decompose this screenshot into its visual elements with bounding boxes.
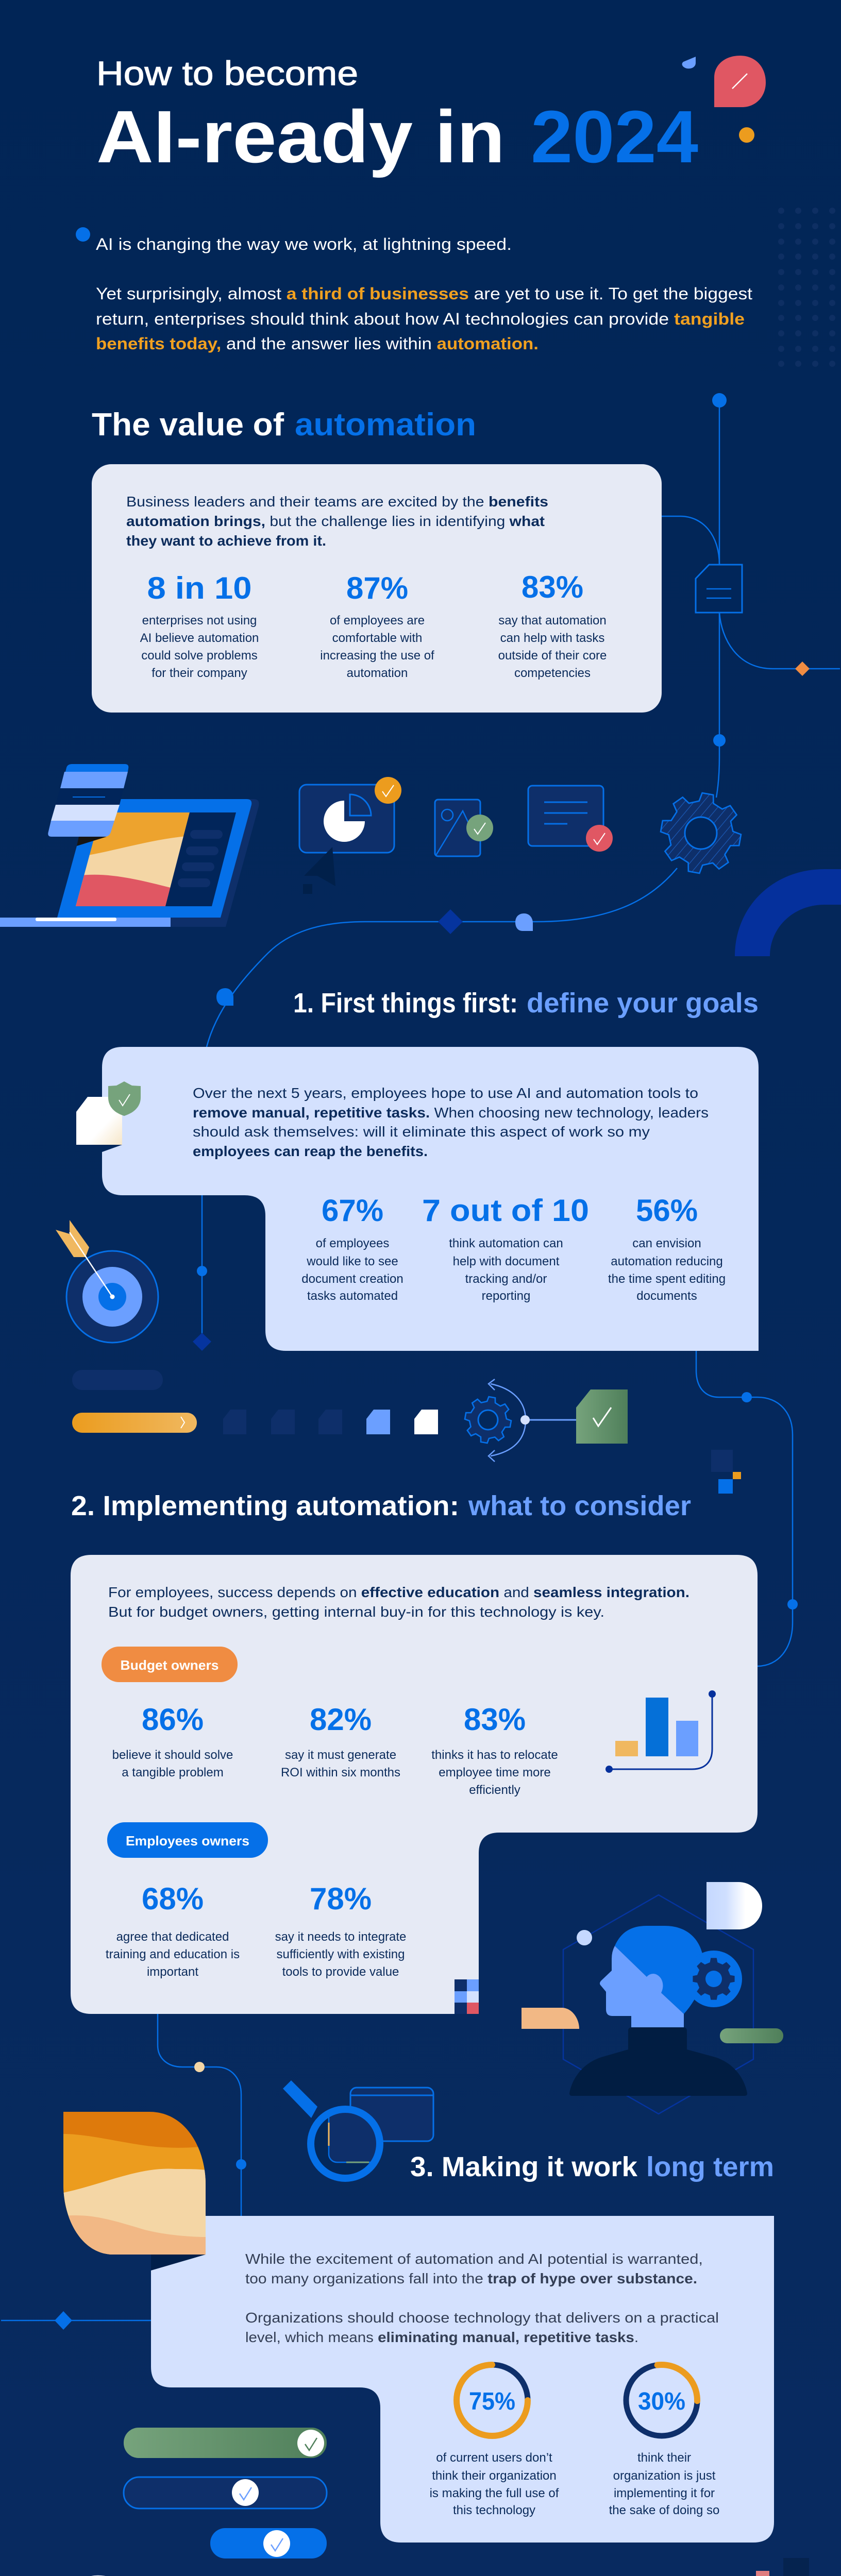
stat: 83%: employee time more — [439, 1766, 551, 1780]
stat: 78%: tools to provide value — [282, 1965, 399, 1979]
pill: employees owners — [107, 1822, 268, 1858]
connector lines: goals section — [193, 1195, 798, 1666]
stat: 68%: training and education is — [106, 1947, 240, 1961]
stat: 7 out of 10: reporting — [482, 1289, 530, 1303]
stat: 67% — [301, 1193, 403, 1303]
stat: 87% — [320, 571, 434, 680]
intro text — [76, 227, 752, 353]
stat: 86%: a tangible problem — [122, 1766, 224, 1780]
stat: 68% — [106, 1882, 240, 1979]
title: AI-ready in — [96, 95, 505, 178]
panel text: While the excitement of automation and AI potential is warranted, — [245, 2251, 703, 2267]
stat: 7 out of 10: tracking and/or — [465, 1272, 547, 1286]
mosaic squares — [455, 1979, 479, 2014]
text: 30% caption: the sake of doing so — [609, 2503, 719, 2517]
connector lines: right side of value section — [207, 393, 840, 1047]
stat: 8 in 10: for their company — [152, 666, 247, 680]
icon: document and shield — [76, 1081, 141, 1152]
panel text: But for budget owners, getting internal buy-in for this technology is key. — [108, 1604, 604, 1620]
panel text — [193, 1085, 709, 1159]
stat: 78%: sufficiently with existing — [276, 1947, 405, 1961]
heading: the value of automation — [92, 407, 476, 443]
stat: 8 in 10: 8 in 10 — [147, 571, 251, 605]
stat: 83%: can help with tasks — [500, 631, 604, 645]
stat: 87%: comfortable with — [332, 631, 422, 645]
stat: 8 in 10 — [140, 571, 259, 680]
stat: 8 in 10: enterprises not using — [142, 614, 257, 628]
text: 75% caption: think their organization — [432, 2469, 557, 2483]
decorative squares lower right — [756, 2558, 809, 2576]
title: How to become — [96, 54, 358, 92]
heading: implementing automation: what to consider — [468, 1490, 691, 1521]
heading: first things first: 1. First things first: — [293, 988, 518, 1019]
panel text: too many organizations fall into the trap of hype over substance. — [245, 2270, 697, 2286]
small document icons — [223, 1410, 438, 1434]
icon: document outline — [696, 565, 742, 613]
stat: 83%: efficiently — [469, 1783, 520, 1797]
text: 75% caption: is making the full use of — [430, 2486, 559, 2500]
stat: 83%: 83% — [522, 570, 583, 604]
panel text: Organizations should choose technology that delivers on a practical — [245, 2310, 719, 2326]
stat: 82% — [281, 1702, 400, 1780]
decorative arch — [735, 869, 841, 956]
stat: 67%: tasks automated — [307, 1289, 398, 1303]
stat: 56%: the time spent editing — [608, 1272, 726, 1286]
text: 30% caption: think their — [637, 2451, 691, 2465]
panel text: they want to achieve from it. — [126, 533, 326, 549]
stat: 86% — [112, 1702, 233, 1780]
icon: title decorations — [682, 56, 766, 143]
panel text: should ask themselves: will it eliminate this aspect of work so my — [193, 1124, 650, 1140]
toggle: dark — [124, 2477, 327, 2509]
pill: employees owners: Employees owners — [126, 1833, 249, 1849]
stat: 82%: ROI within six months — [281, 1766, 400, 1780]
illustration: laptop — [0, 764, 259, 927]
heading: making it work long term: 3. Making it work — [410, 2151, 638, 2182]
stat: 83%: thinks it has to relocate — [431, 1748, 558, 1762]
panel text: Over the next 5 years, employees hope to use AI and automation tools to — [193, 1085, 698, 1101]
heading: implementing automation: 2. Implementing automation: — [71, 1490, 459, 1521]
stat: 67%: 67% — [322, 1193, 383, 1228]
title — [96, 54, 698, 178]
panel text: employees can reap the benefits. — [193, 1143, 428, 1159]
stat: 68%: important — [147, 1965, 198, 1979]
illustration: head with gear — [522, 1882, 783, 2114]
panel text — [108, 1584, 689, 1620]
stat: 83% — [431, 1702, 558, 1797]
panel text — [245, 2251, 719, 2345]
stat: 78%: say it needs to integrate — [275, 1930, 406, 1944]
stat: 82%: say it must generate — [285, 1748, 396, 1762]
icon: gear to green document — [461, 1379, 628, 1462]
stat: 87%: 87% — [346, 571, 408, 605]
text: 30% caption — [609, 2451, 719, 2517]
intro text: AI is changing the way we work, at lightning speed. — [96, 235, 512, 253]
toggle: blue — [210, 2528, 327, 2558]
panel text: For employees, success depends on effective education and seamless integration. — [108, 1584, 689, 1600]
stat: 68%: 68% — [142, 1882, 204, 1916]
heading: making it work long term: long term — [646, 2151, 774, 2182]
intro text: return, enterprises should think about how AI technologies can provide tangible — [96, 310, 745, 328]
panel: define your goals — [102, 1047, 759, 1351]
ring chart: 75% — [457, 2365, 528, 2436]
stat: 7 out of 10: think automation can — [449, 1236, 563, 1250]
icon: magnifier over window — [283, 2080, 433, 2178]
stat: 83%: 83% — [464, 1702, 526, 1737]
stat: 8 in 10: could solve problems — [141, 649, 258, 663]
stat: 83%: outside of their core — [498, 649, 607, 663]
stat: 82%: 82% — [310, 1702, 372, 1737]
stat: 7 out of 10: 7 out of 10 — [422, 1193, 589, 1228]
ring chart: 30%: 30% — [638, 2388, 685, 2415]
stat: 7 out of 10 — [422, 1193, 589, 1303]
icon: large gear — [655, 787, 747, 879]
stat: 67%: document creation — [301, 1272, 403, 1286]
panel text: Business leaders and their teams are excited by the benefits — [126, 494, 548, 510]
text: 75% caption — [430, 2451, 559, 2517]
text: 75% caption: this technology — [453, 2503, 535, 2517]
left connector with diamond — [1, 2311, 151, 2330]
stat: 8 in 10: AI believe automation — [140, 631, 259, 645]
stat: 56% — [608, 1193, 726, 1303]
heading: making it work long term — [410, 2151, 774, 2182]
heading: first things first: define your goals — [527, 988, 759, 1019]
heading: the value of automation: The value of — [92, 407, 284, 443]
panel text: level, which means eliminating manual, repetitive tasks . — [245, 2329, 638, 2345]
heading: first things first — [293, 988, 759, 1019]
stat: 87%: automation — [347, 666, 408, 680]
intro text: benefits today, and the answer lies within automation. — [96, 334, 539, 353]
panel: what to consider — [71, 1555, 758, 2014]
icon: text card with check — [528, 786, 613, 852]
text: 30% caption: implementing it for — [614, 2486, 715, 2500]
stat: 56%: 56% — [636, 1193, 698, 1228]
stat: 68%: agree that dedicated — [116, 1930, 229, 1944]
illustration: layered document — [63, 2112, 206, 2270]
stat: 86%: 86% — [142, 1702, 204, 1737]
bar chart icon — [605, 1690, 716, 1773]
connector lines: below panel 2 — [158, 2014, 246, 2216]
decorative squares — [711, 1450, 741, 1494]
heading: implementing automation — [71, 1490, 691, 1521]
stat: 83% — [498, 570, 607, 680]
stat: 56%: can envision — [632, 1236, 701, 1250]
heading: the value of automation: automation — [295, 407, 476, 443]
top-right dot grid — [778, 208, 835, 367]
ring chart: 30% — [622, 2361, 701, 2440]
stat: 56%: documents — [636, 1289, 697, 1303]
pill: budget owners — [102, 1647, 238, 1682]
ring chart: 75%: 75% — [469, 2388, 515, 2415]
panel text: automation brings, but the challenge lies in identifying what — [126, 513, 545, 529]
toggle: green — [124, 2428, 327, 2458]
text: 30% caption: organization is just — [613, 2469, 716, 2483]
stat: 7 out of 10: help with document — [453, 1255, 560, 1268]
icon: pie chart window — [299, 777, 401, 894]
panel text — [126, 494, 548, 549]
stat: 78%: 78% — [310, 1882, 372, 1916]
stat: 56%: automation reducing — [611, 1255, 723, 1268]
text: 75% caption: of current users don’t — [436, 2451, 552, 2465]
stat: 67%: would like to see — [306, 1255, 398, 1268]
icon: target and arrow — [56, 1220, 158, 1343]
progress pills — [72, 1370, 197, 1433]
intro text: Yet surprisingly, almost a third of businesses are yet to use it. To get the biggest — [96, 284, 752, 303]
panel text: remove manual, repetitive tasks. When choosing new technology, leaders — [193, 1105, 709, 1121]
stat: 78% — [275, 1882, 406, 1979]
pill: budget owners: Budget owners — [121, 1657, 218, 1673]
stat: 86%: believe it should solve — [112, 1748, 233, 1762]
icon: image card with check — [435, 800, 493, 856]
title: 2024 — [531, 95, 698, 178]
stat: 87%: of employees are — [330, 614, 425, 628]
panel: value of automation — [92, 464, 662, 713]
stat: 87%: increasing the use of — [320, 649, 434, 663]
panel: making it work long term — [151, 2216, 774, 2543]
stat: 83%: say that automation — [498, 614, 607, 628]
stat: 67%: of employees — [316, 1236, 389, 1250]
stat: 83%: competencies — [514, 666, 591, 680]
